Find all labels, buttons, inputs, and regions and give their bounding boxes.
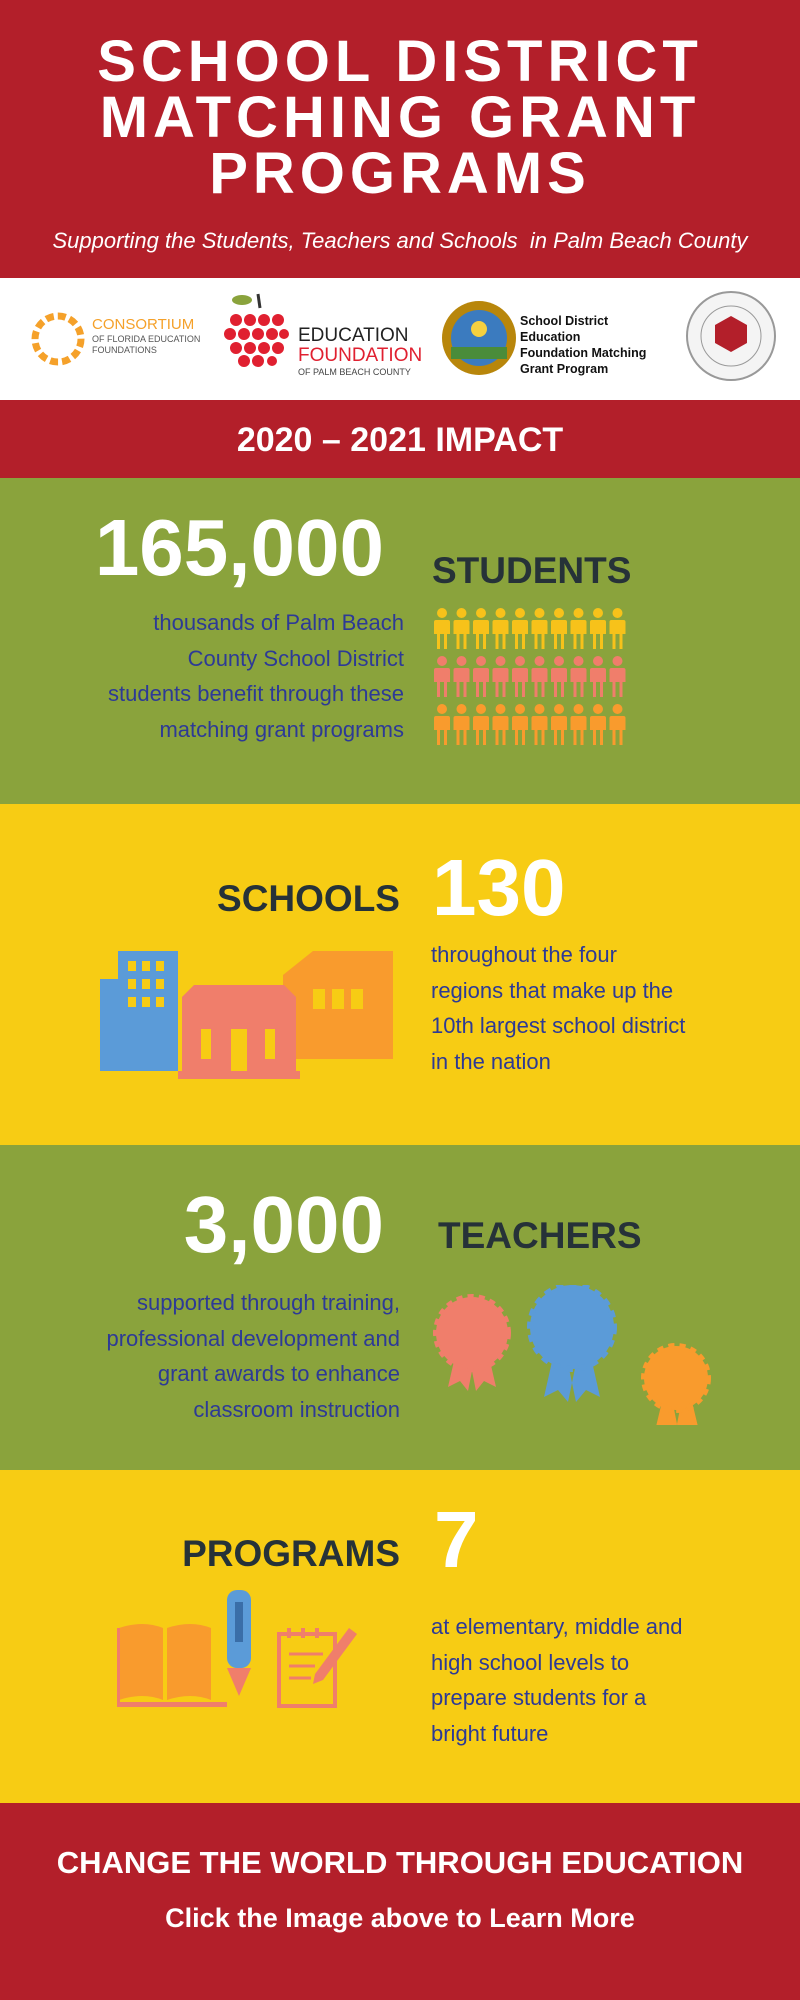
teachers text: supported through training,	[137, 1290, 400, 1315]
icon: people rows	[434, 608, 626, 745]
title: PROGRAMS	[209, 141, 591, 206]
logo: education foundation: EDUCATION	[298, 325, 408, 346]
schools text	[431, 942, 686, 1074]
programs text: at elementary, middle and	[431, 1614, 683, 1639]
logo: state seal: School District Education	[520, 314, 608, 344]
logo: state seal	[442, 301, 646, 376]
number 165,000: 165,000	[95, 503, 384, 592]
panel: teachers	[0, 1145, 800, 1470]
schools text: regions that make up the	[431, 978, 673, 1002]
label schools: SCHOOLS	[217, 878, 400, 919]
logo: school district	[686, 291, 776, 381]
panel: students	[0, 478, 800, 804]
title: MATCHING GRANT	[100, 85, 700, 150]
teachers text: professional development and	[106, 1326, 400, 1350]
teachers text: classroom instruction	[193, 1396, 400, 1422]
number 3,000: 3,000	[184, 1180, 384, 1269]
title	[97, 29, 703, 206]
schools text: throughout the four	[431, 942, 617, 967]
label programs: PROGRAMS	[182, 1533, 400, 1574]
teachers text	[106, 1290, 400, 1422]
students text: County School District	[188, 646, 404, 670]
schools text: in the nation	[431, 1048, 551, 1074]
impact heading: 2020 – 2021 IMPACT	[237, 421, 563, 459]
footer heading: CHANGE THE WORLD THROUGH EDUCATION	[57, 1845, 743, 1880]
number 7: 7	[434, 1495, 478, 1584]
students text: matching grant programs	[159, 716, 404, 742]
icon: book pen notepad	[117, 1590, 357, 1708]
logo band	[0, 278, 800, 400]
logo: consortium: FOUNDATIONS	[92, 345, 157, 355]
label teachers: TEACHERS	[438, 1215, 642, 1256]
students text: students benefit through these	[108, 681, 404, 706]
logo: consortium: OF FLORIDA EDUCATION	[92, 334, 200, 344]
programs text	[431, 1614, 683, 1746]
logo: state seal: Foundation Matching	[520, 346, 646, 360]
schools text: 10th largest school district	[431, 1013, 685, 1038]
panel: schools	[0, 804, 800, 1145]
logo: state seal: Grant Program	[520, 362, 608, 376]
subtitle: Supporting the Students, Teachers and Schools in Palm Beach County	[52, 228, 748, 253]
title: SCHOOL DISTRICT	[97, 29, 703, 94]
programs text: high school levels to	[431, 1650, 629, 1674]
students text: thousands of Palm Beach	[153, 610, 404, 635]
icon: ribbons	[433, 1285, 711, 1425]
programs text: prepare students for a	[431, 1685, 646, 1710]
icon: buildings	[100, 951, 393, 1079]
programs text: bright future	[431, 1720, 548, 1746]
impact band	[0, 400, 800, 478]
label students: STUDENTS	[432, 550, 631, 591]
teachers text: grant awards to enhance	[158, 1361, 400, 1386]
footer link text: Click the Image above to Learn More	[165, 1903, 635, 1933]
number 130: 130	[432, 843, 565, 932]
logo: education foundation	[224, 294, 422, 377]
logo: consortium	[32, 312, 200, 366]
footer band	[0, 1803, 800, 2000]
students text	[108, 610, 404, 742]
logo: education foundation: OF PALM BEACH COUNTY	[298, 367, 411, 377]
panel: programs	[0, 1470, 800, 1803]
logo: education foundation: FOUNDATION	[298, 345, 422, 366]
logo: consortium: CONSORTIUM	[92, 316, 194, 333]
header band	[0, 0, 800, 278]
